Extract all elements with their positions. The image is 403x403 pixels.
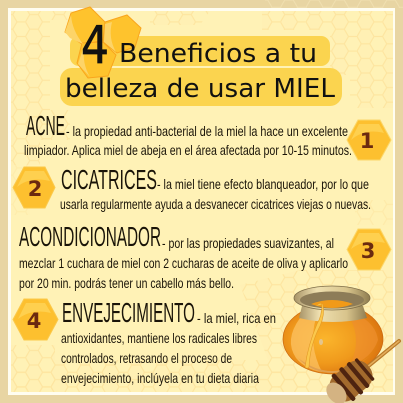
title highlight band 2: [60, 68, 342, 106]
honeycomb icon: [65, 7, 141, 78]
icon: hexagon 3: 3: [361, 239, 375, 263]
icon: hexagon 1: 1: [360, 129, 374, 153]
icon: honey pot: [283, 286, 383, 374]
text: envejecimiento line 1: - la miel, rica en: [197, 310, 276, 326]
item 1: acne: [24, 110, 391, 160]
title highlight band 1: [70, 36, 330, 66]
item 4: envejecimiento: [13, 297, 276, 386]
heading: acondicionador: ACONDICIONADOR: [19, 221, 161, 252]
big number 4: 4: [81, 16, 109, 76]
icon: hexagon 4: [13, 299, 58, 340]
heading: envejecimiento: ENVEJECIMIENTO: [62, 297, 195, 328]
icon: hexagon 3: [347, 229, 391, 270]
text: envejecimiento line 3: controlados, retrasando el proceso de: [61, 350, 232, 366]
heading: cicatrices: CICATRICES: [61, 164, 157, 195]
title: [60, 7, 342, 106]
text: envejecimiento line 4: envejecimiento, inclúyela en tu dieta diaria: [61, 370, 259, 386]
icon: hexagon 2: 2: [28, 177, 42, 201]
title line 2: belleza de usar MIEL: [65, 74, 336, 104]
item 3: acondicionador: [19, 221, 391, 291]
text: acondicionador line 3: por 20 min. podrás tener un cabello más bello.: [19, 275, 234, 291]
icon: hexagon 4: 4: [27, 309, 41, 333]
icon: hexagon 1: [347, 120, 391, 160]
icon: honey dipper: [319, 341, 399, 403]
decorative outer hexes: [265, 0, 403, 8]
text: envejecimiento line 2: antioxidantes, mantiene los radicales libres: [61, 330, 257, 346]
item 2: cicatrices: [13, 164, 371, 212]
icon: hexagon 2: [13, 167, 55, 208]
title line 1: Beneficios a tu: [119, 39, 317, 69]
text: acondicionador line 1: - por las propiedades suavizantes, al: [162, 235, 334, 251]
heading: acne: ACNE: [26, 110, 65, 141]
